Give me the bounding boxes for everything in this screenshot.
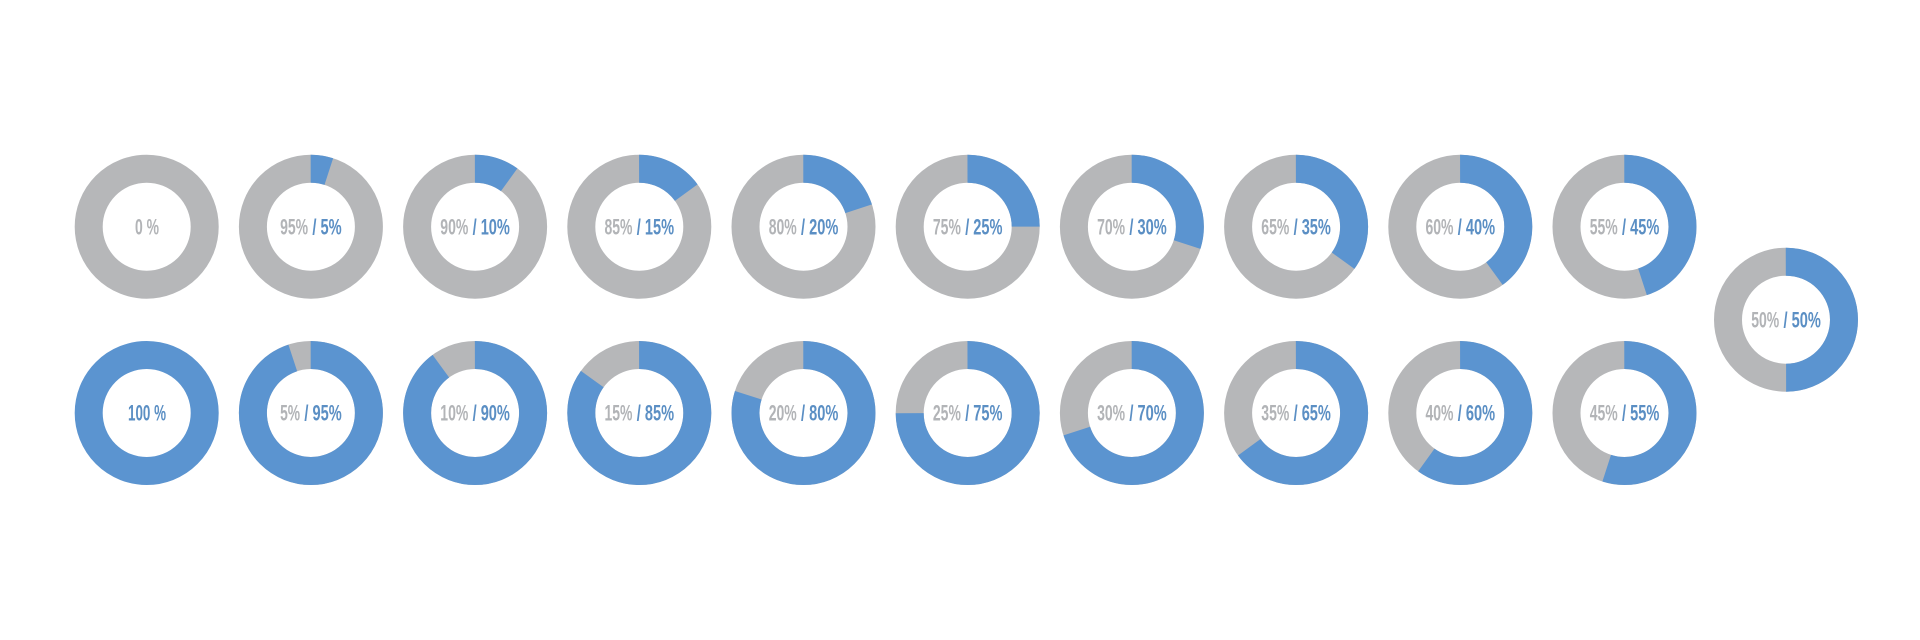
label: 60% / 40%	[1426, 214, 1495, 239]
segment: 55% blue	[1566, 355, 1682, 471]
label: 50% / 50%: / 50%	[1784, 307, 1821, 332]
label: 10% / 90%: / 90%	[473, 401, 510, 426]
label: 10% / 90%: 10%	[440, 401, 468, 426]
donut: 40% / 60%	[1402, 355, 1518, 471]
donut: 90% / 10%	[417, 169, 533, 285]
label: 85% / 15%	[604, 214, 674, 239]
label: 5% / 95%: 5%	[280, 401, 300, 426]
donut: 35% / 65%	[1238, 355, 1354, 471]
label: 65% / 35%: / 35%	[1294, 214, 1331, 239]
donut: 65% / 35%	[1238, 169, 1354, 285]
donut: 100%	[89, 355, 205, 471]
segment: 45% blue	[1566, 169, 1682, 285]
label: 60% / 40%: / 40%	[1458, 214, 1495, 239]
donut: 0%	[89, 169, 205, 285]
label: 90% / 10%	[440, 214, 510, 239]
label: 55% / 45%	[1590, 214, 1659, 239]
label: 80% / 20%	[769, 214, 838, 239]
label: 85% / 15%: / 15%	[637, 214, 674, 239]
label: 85% / 15%: 85%	[604, 214, 632, 239]
segment: 20% blue	[746, 169, 862, 285]
label: 0%: 0 %	[135, 214, 159, 239]
segment: 35% blue	[1238, 169, 1354, 285]
label: 90% / 10%: 90%	[440, 214, 468, 239]
label: 10% / 90%	[440, 401, 510, 426]
label: 35% / 65%: 35%	[1261, 401, 1289, 426]
label: 20% / 80%	[769, 401, 838, 426]
donut: 55% / 45%	[1566, 169, 1682, 285]
segment: 95% blue	[253, 355, 369, 471]
segment: 80% blue	[746, 355, 862, 471]
label: 45% / 55%: / 55%	[1622, 401, 1659, 426]
donut: 45% / 55%	[1566, 355, 1682, 471]
label: 55% / 45%: 55%	[1590, 214, 1618, 239]
segment: 75% blue	[910, 355, 1026, 471]
segment: 70% blue	[1074, 355, 1190, 471]
label: 15% / 85%	[604, 401, 674, 426]
label: 100%: 100 %	[128, 401, 166, 426]
label: 25% / 75%: 25%	[933, 401, 961, 426]
label: 70% / 30%	[1097, 214, 1167, 239]
label: 50% / 50%	[1751, 307, 1821, 332]
donut: 25% / 75%	[910, 355, 1026, 471]
segment: 40% blue	[1402, 169, 1518, 285]
label: 65% / 35%	[1261, 214, 1331, 239]
donut: 75% / 25%	[910, 169, 1026, 285]
donut: 70% / 30%	[1074, 169, 1190, 285]
label: 90% / 10%: / 10%	[473, 214, 510, 239]
segment: 65% blue	[1238, 355, 1354, 471]
label: 70% / 30%: 70%	[1097, 214, 1125, 239]
segment: 15% blue	[581, 169, 697, 285]
label: 20% / 80%: 20%	[769, 401, 797, 426]
donut: 5% / 95%	[253, 355, 369, 471]
label: 15% / 85%: 15%	[604, 401, 632, 426]
label: 45% / 55%: 45%	[1590, 401, 1618, 426]
label: 25% / 75%	[933, 401, 1002, 426]
donut: 10% / 90%	[417, 355, 533, 471]
label: 50% / 50%: 50%	[1751, 307, 1779, 332]
donut: 30% / 70%	[1074, 355, 1190, 471]
label: 30% / 70%	[1097, 401, 1167, 426]
label: 75% / 25%	[933, 214, 1002, 239]
label: 60% / 40%: 60%	[1426, 214, 1454, 239]
label: 55% / 45%: / 45%	[1622, 214, 1659, 239]
donut: 60% / 40%	[1402, 169, 1518, 285]
donut: 85% / 15%	[581, 169, 697, 285]
label: 40% / 60%: / 60%	[1458, 401, 1495, 426]
label: 40% / 60%	[1426, 401, 1495, 426]
segment: 10% blue	[417, 169, 533, 285]
segment: 50% blue	[1728, 262, 1844, 378]
donut: 15% / 85%	[581, 355, 697, 471]
label: 80% / 20%: / 20%	[801, 214, 838, 239]
label: 35% / 65%	[1261, 401, 1331, 426]
label: 40% / 60%: 40%	[1426, 401, 1454, 426]
label: 20% / 80%: / 80%	[801, 401, 838, 426]
segment: 90% blue	[417, 355, 533, 471]
label: 15% / 85%: / 85%	[637, 401, 674, 426]
donut: 80% / 20%	[746, 169, 862, 285]
segment: 85% blue	[581, 355, 697, 471]
label: 30% / 70%: 30%	[1097, 401, 1125, 426]
label: 75% / 25%: 75%	[933, 214, 961, 239]
segment: 60% blue	[1402, 355, 1518, 471]
donut: 50% / 50%	[1728, 262, 1844, 378]
label: 5% / 95%: / 95%	[304, 401, 342, 426]
label: 30% / 70%: / 70%	[1129, 401, 1167, 426]
label: 70% / 30%: / 30%	[1129, 214, 1167, 239]
segment: 5% blue	[253, 169, 369, 285]
label: 95% / 5%: / 5%	[312, 214, 342, 239]
label: 35% / 65%: / 65%	[1294, 401, 1331, 426]
label: 75% / 25%: / 25%	[965, 214, 1002, 239]
label: 80% / 20%: 80%	[769, 214, 797, 239]
label: 25% / 75%: / 75%	[965, 401, 1002, 426]
label: 65% / 35%: 65%	[1261, 214, 1289, 239]
donut: 20% / 80%	[746, 355, 862, 471]
segment: 30% blue	[1074, 169, 1190, 285]
segment: 25% blue	[910, 169, 1026, 285]
label: 95% / 5%: 95%	[280, 214, 308, 239]
label: 5% / 95%	[280, 401, 342, 426]
label: 45% / 55%	[1590, 401, 1659, 426]
donut: 95% / 5%	[253, 169, 369, 285]
